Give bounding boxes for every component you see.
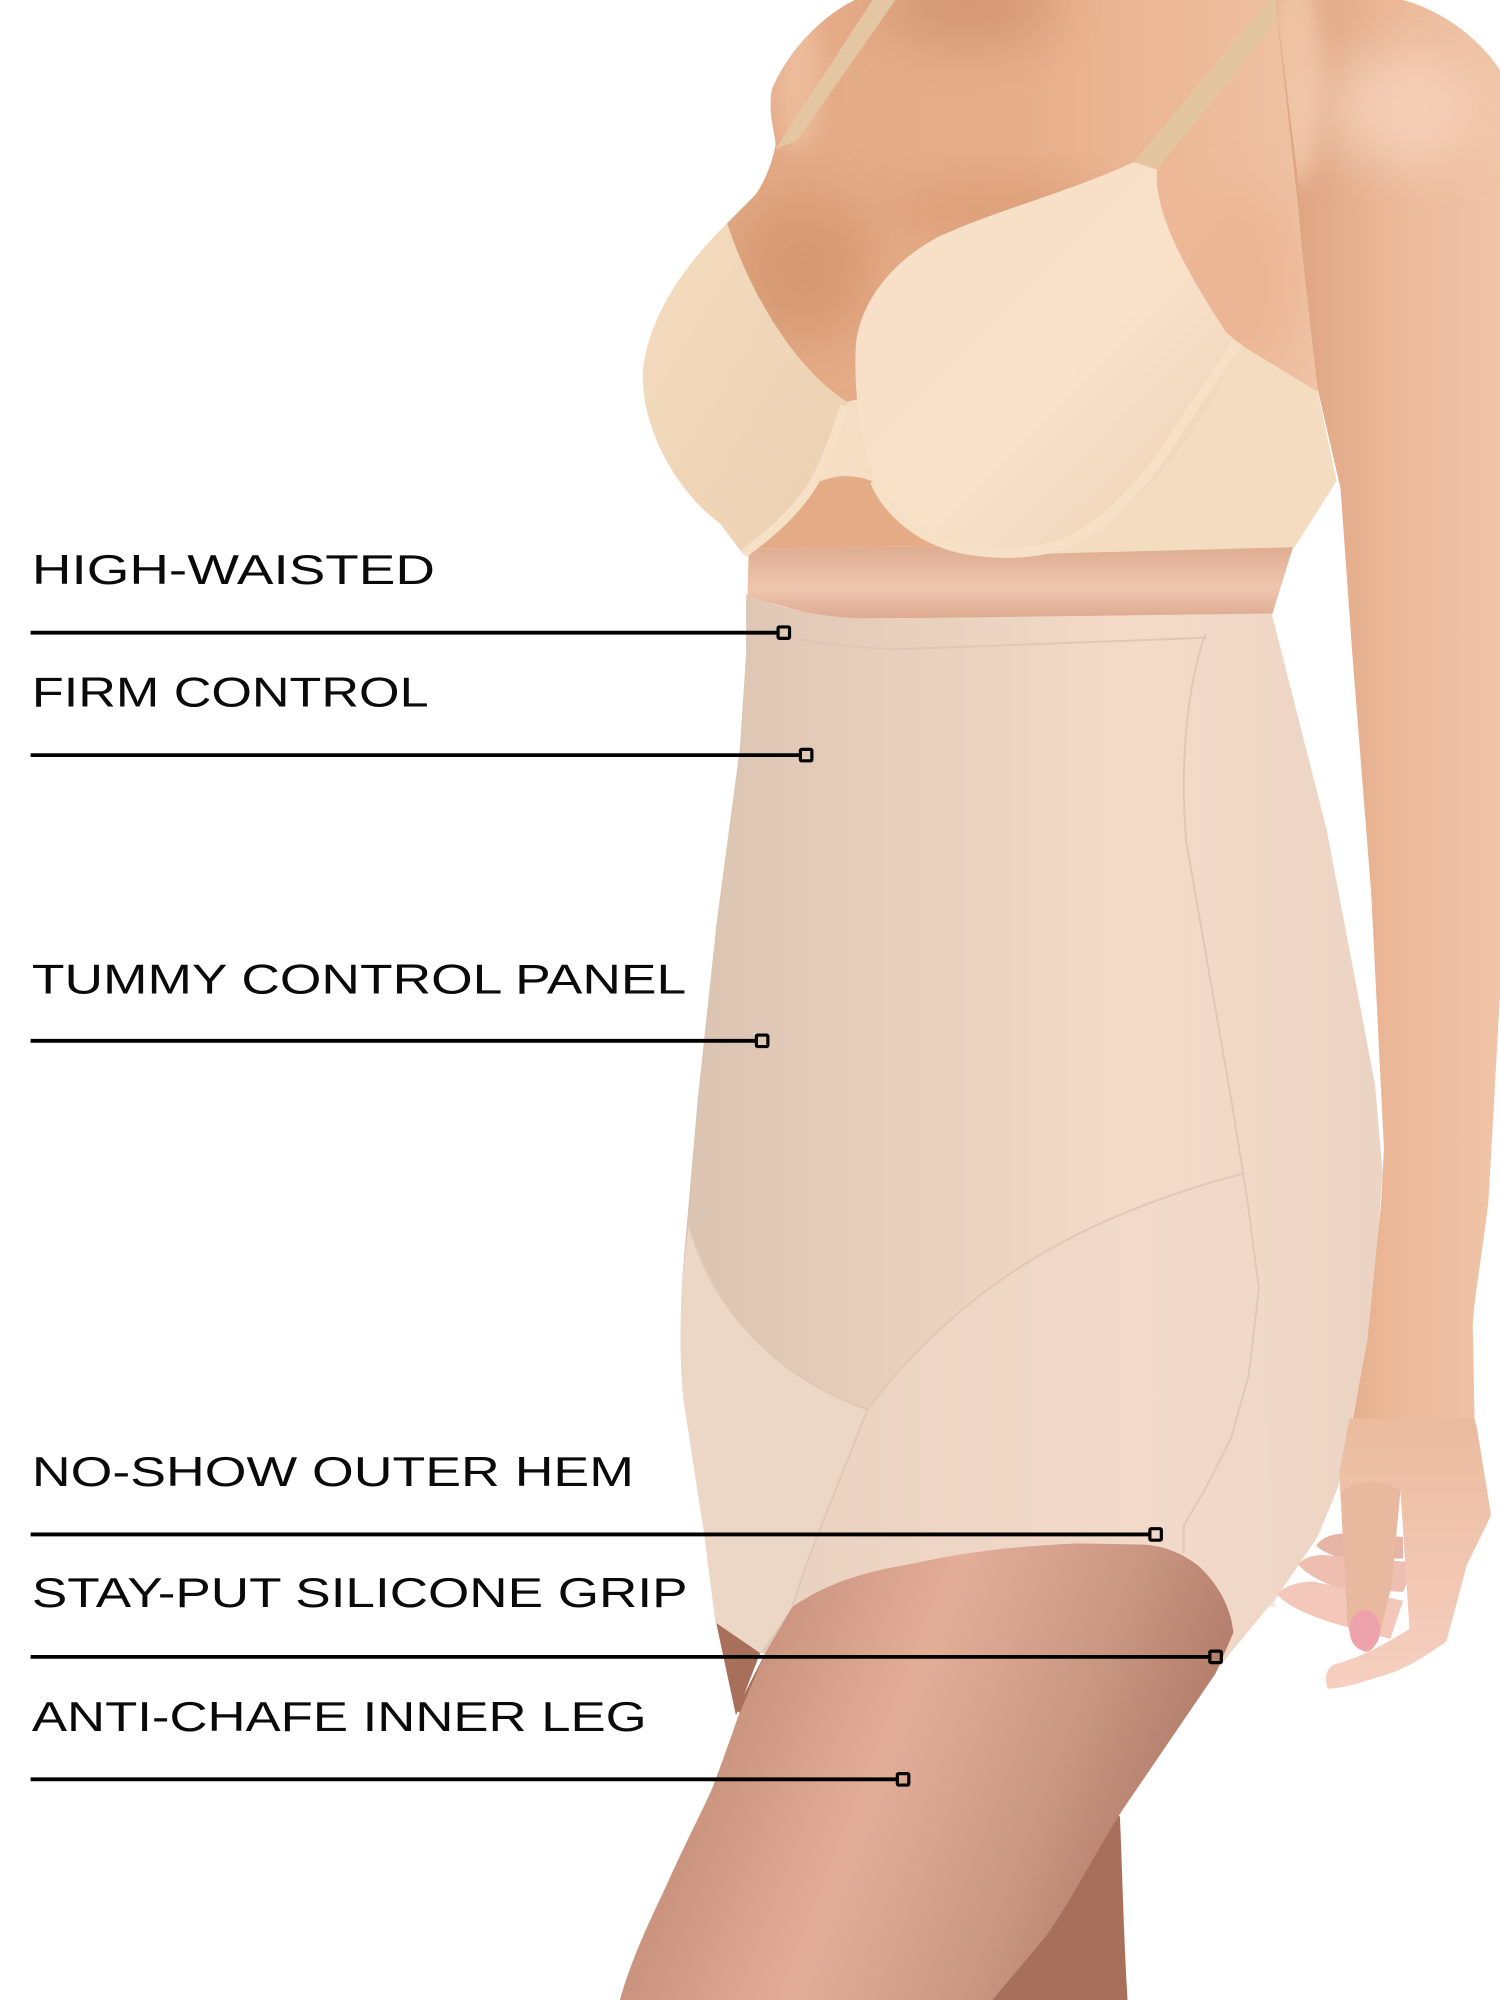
callout: stay-put silicone grip: STAY-PUT SILICONE GRIP xyxy=(32,1569,687,1616)
shorts xyxy=(681,594,1383,1709)
bra cup: far xyxy=(643,223,847,555)
bra strap: right xyxy=(1134,0,1295,170)
bra strap: left xyxy=(776,0,895,149)
lower left panel tint xyxy=(681,1224,867,1653)
callout: no-show outer hem xyxy=(31,1448,1161,1540)
front leg xyxy=(620,1543,1233,2000)
bra cup: near xyxy=(855,162,1240,552)
callout: high-waisted xyxy=(31,546,790,638)
callout: tummy control panel xyxy=(31,956,768,1047)
callout: high-waisted: HIGH-WAISTED xyxy=(32,546,435,593)
shoulder blend xyxy=(1267,0,1473,185)
rear leg xyxy=(716,1620,1128,2000)
upper chest skin xyxy=(727,0,1318,548)
hand xyxy=(1326,1418,1491,1689)
back fingers xyxy=(1277,1533,1416,1639)
callout: firm control xyxy=(31,669,812,761)
midriff xyxy=(747,542,1295,619)
callout: no-show outer hem: NO-SHOW OUTER HEM xyxy=(32,1448,634,1495)
bra gore xyxy=(812,398,880,486)
icon: model figure xyxy=(620,0,1500,2000)
bra xyxy=(643,162,1337,555)
callout: anti-chafe inner leg: ANTI-CHAFE INNER LEG xyxy=(32,1693,647,1740)
callout: tummy control panel: TUMMY CONTROL PANEL xyxy=(32,956,686,1003)
hip panel tint xyxy=(792,1173,1276,1607)
underwire trim xyxy=(875,342,1237,553)
callout: anti-chafe inner leg xyxy=(31,1693,909,1785)
callout: firm control: FIRM CONTROL xyxy=(32,669,429,716)
shorts seams xyxy=(689,626,1259,1607)
palm and thumb xyxy=(1326,1418,1491,1689)
callout: stay-put silicone grip xyxy=(31,1569,1221,1663)
bra band xyxy=(969,344,1337,554)
chest shading xyxy=(733,0,1295,370)
fingernail xyxy=(1349,1610,1380,1651)
arm xyxy=(1276,0,1500,1422)
index finger xyxy=(1341,1482,1401,1652)
